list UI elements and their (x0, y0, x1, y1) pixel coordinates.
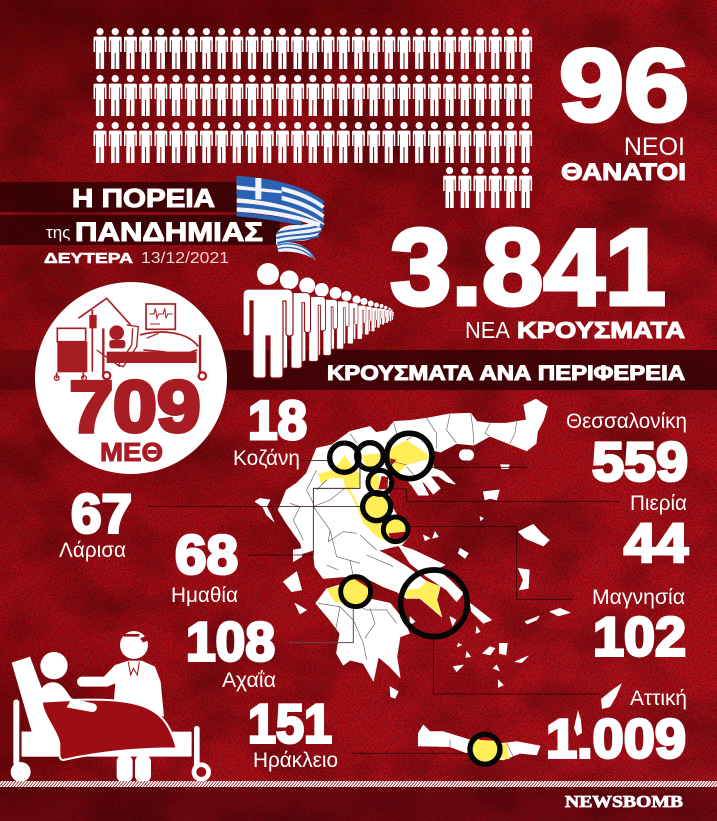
region: Πιερία: Πιερία (630, 492, 687, 515)
deaths label (561, 133, 686, 186)
region: Ημαθία: 68 (175, 524, 238, 586)
deaths number: 96 (559, 28, 689, 142)
band: regions (0, 350, 717, 390)
region: Ηράκλειο: Ηράκλειο (253, 749, 338, 772)
deaths label: ΘΑΝΑΤΟΙ (561, 159, 686, 186)
title: ΠΑΝΔΗΜΙΑΣ (75, 217, 263, 247)
icon: ICU bed (54, 298, 206, 380)
region: Θεσσαλονίκη (566, 410, 688, 492)
mainland (278, 399, 547, 617)
icon: Dodecanese islands (574, 683, 622, 736)
region: Ηράκλειο: 151 (248, 692, 332, 754)
region: Ημαθία: Ημαθία (171, 584, 238, 607)
band: title line 1 (0, 182, 237, 212)
region: Ημαθία (171, 524, 238, 607)
deaths label: ΝΕΟΙ (624, 133, 685, 161)
region: Κοζάνη: Κοζάνη (233, 447, 300, 470)
region: Λάρισα: 67 (71, 482, 132, 544)
region: Αττική: Αττική (630, 687, 687, 710)
region: Κοζάνη (233, 389, 307, 470)
title: της (46, 223, 70, 242)
hatched divider (0, 781, 717, 787)
icon: greek flag ribbon (237, 176, 323, 260)
red overlays (353, 458, 497, 741)
prefecture borders (290, 413, 517, 757)
ICU number: 709 (70, 368, 200, 448)
region: Αχαΐα: 108 (186, 610, 275, 672)
cases label (465, 317, 685, 343)
date: ΔΕΥΤΕΡΑ (44, 250, 133, 267)
region: Θεσσαλονίκη: 559 (592, 430, 688, 492)
region: Πιερία: 44 (624, 512, 688, 574)
cases label: ΚΡΟΥΣΜΑΤΑ (517, 317, 685, 343)
region: Αττική: 1.009 (546, 708, 686, 770)
map of Greece (148, 399, 620, 764)
yellow regions (318, 440, 509, 759)
rings (330, 433, 500, 764)
Peloponnese (316, 585, 409, 681)
band: title line 2 (0, 215, 280, 245)
crowd icon (243, 263, 394, 378)
leader lines (148, 461, 620, 753)
yellow circle fills (365, 495, 389, 519)
cases number: 3.841 (390, 206, 666, 328)
region: Λάρισα: Λάρισα (59, 539, 126, 562)
ICU label: ΜΕΘ (100, 437, 163, 467)
title (46, 183, 263, 247)
region: Κοζάνη: 18 (248, 389, 307, 451)
date: 13/12/2021 (141, 250, 229, 267)
region: Μαγνησία: Μαγνησία (592, 586, 685, 609)
region: Αχαΐα: Αχαΐα (222, 669, 276, 692)
islands (255, 450, 570, 760)
panel: ICU circle (35, 282, 227, 474)
region: Λάρισα (59, 482, 132, 562)
region: Μαγνησία: 102 (593, 606, 686, 668)
icon: doctor and patient (11, 631, 209, 782)
cases label: ΝΕΑ (465, 317, 511, 343)
region: Θεσσαλονίκη: Θεσσαλονίκη (566, 410, 687, 433)
deaths pictogram (94, 28, 532, 208)
logo: Newsbomb: NEWSBOMB (565, 792, 683, 811)
regions heading: ΚΡΟΥΣΜΑΤΑ ΑΝΑ ΠΕΡΙΦΕΡΕΙΑ (327, 362, 685, 385)
date (44, 250, 229, 267)
title: Η ΠΟΡΕΙΑ (72, 183, 215, 213)
